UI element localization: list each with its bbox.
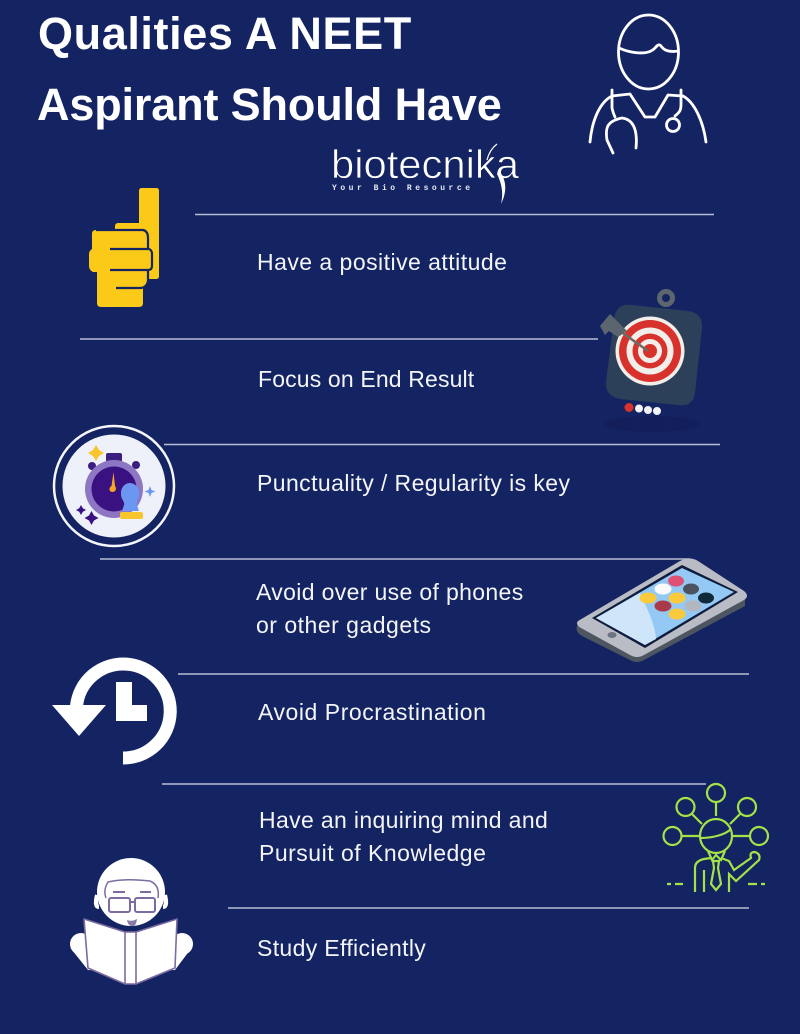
icon: mind map person bbox=[664, 784, 768, 892]
icon: smartphone bbox=[577, 558, 747, 662]
text: positive attitude: Have a positive attitude bbox=[257, 249, 507, 275]
text: avoid phones: Avoid over use of phones bbox=[256, 579, 524, 605]
text: inquiring mind: Have an inquiring mind and bbox=[259, 807, 548, 833]
text: inquiring mind: Pursuit of Knowledge bbox=[259, 840, 486, 866]
logo: biotecnika bbox=[331, 143, 520, 187]
icon: history clock bbox=[52, 664, 170, 758]
text: inquiring mind bbox=[259, 807, 548, 866]
icon: person reading bbox=[70, 858, 193, 984]
text: avoid phones bbox=[256, 579, 524, 638]
title bbox=[37, 8, 502, 130]
text: avoid procrastination: Avoid Procrastination bbox=[258, 699, 486, 725]
text: punctuality: Punctuality / Regularity is key bbox=[257, 470, 570, 496]
logo: Your Bio Resource bbox=[332, 184, 470, 193]
icon: thumbs up bbox=[89, 188, 159, 307]
icon: doctor bbox=[590, 15, 706, 153]
text: study efficiently: Study Efficiently bbox=[257, 935, 426, 961]
logo bbox=[331, 143, 520, 204]
icon: stopwatch bbox=[54, 426, 174, 546]
title: Qualities A NEET bbox=[38, 8, 412, 59]
text: focus on end result: Focus on End Result bbox=[258, 366, 474, 392]
title: Aspirant Should Have bbox=[37, 79, 502, 130]
icon: dartboard target bbox=[600, 292, 702, 432]
text: avoid phones: or other gadgets bbox=[256, 612, 432, 638]
